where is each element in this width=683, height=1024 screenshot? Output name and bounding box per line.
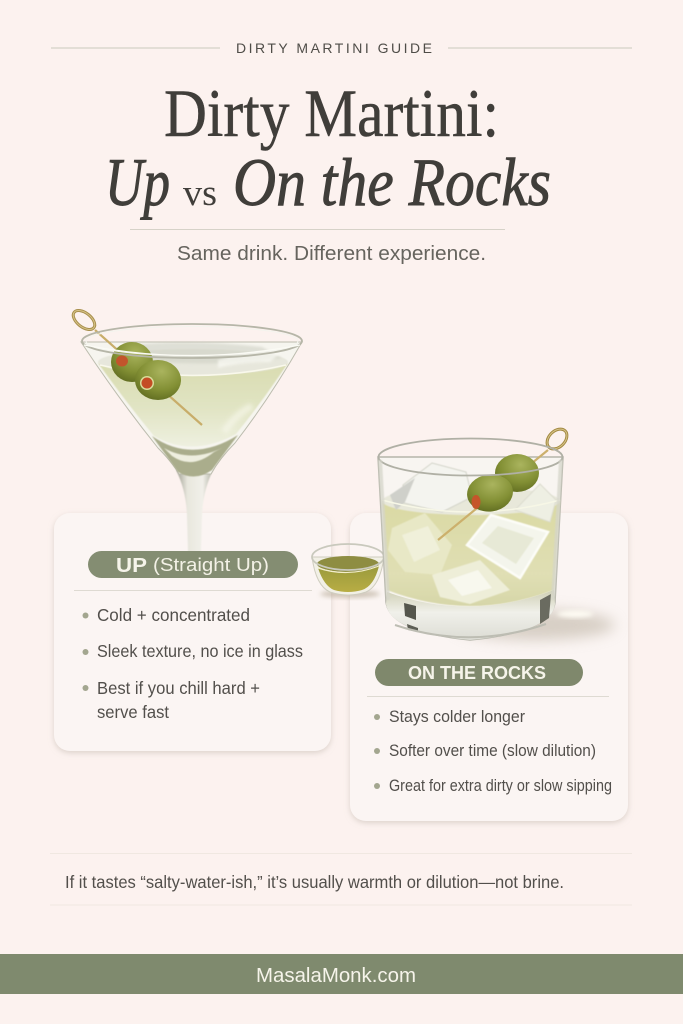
rim xyxy=(378,438,562,476)
bowl base tint xyxy=(152,435,238,477)
title: Dirty Martini: xyxy=(164,75,499,151)
bullet list: on the rocks: Stays colder longer xyxy=(389,708,525,726)
pill heading: on the rocks xyxy=(375,659,583,686)
panel: on the rocks xyxy=(350,513,628,821)
liquid xyxy=(98,363,288,447)
cocktail pick xyxy=(438,425,571,540)
stem xyxy=(176,468,214,552)
header label: DIRTY MARTINI GUIDE xyxy=(236,40,432,56)
bullet list: up: Sleek texture, no ice in glass xyxy=(97,641,303,661)
glass base xyxy=(386,590,555,640)
glass body xyxy=(378,457,563,640)
liquid xyxy=(382,500,560,606)
rim xyxy=(82,324,302,358)
panel: up xyxy=(54,513,331,751)
bullet list: up: serve fast xyxy=(97,702,169,722)
olive back xyxy=(495,454,539,492)
bullet list: on the rocks xyxy=(374,708,612,795)
illustration: small brine bowl xyxy=(312,544,384,598)
panel content: on the rocks xyxy=(367,659,612,795)
olive front xyxy=(465,471,515,515)
title: On the Rocks xyxy=(233,144,551,220)
glass bowl xyxy=(81,342,302,474)
cocktail pick xyxy=(70,307,202,425)
bullet list: up: Best if you chill hard + xyxy=(97,678,260,698)
bullet list: on the rocks: Great for extra dirty or slow sipping xyxy=(389,777,612,795)
title xyxy=(105,75,551,220)
pill heading: up xyxy=(88,551,298,578)
illustration: rocks glass with ice and olives xyxy=(378,425,615,640)
pill heading: on the rocks: ON THE ROCKS xyxy=(408,662,546,683)
bullet list: on the rocks: Softer over time (slow dilution) xyxy=(389,742,596,760)
subtitle: Same drink. Different experience. xyxy=(177,242,486,265)
bullet list: up: Cold + concentrated xyxy=(97,605,250,625)
surface xyxy=(98,349,288,375)
bullet list: up xyxy=(82,605,303,722)
table shadow xyxy=(455,610,615,640)
footer band xyxy=(0,954,683,994)
liquid surface line xyxy=(382,500,560,512)
title: Up xyxy=(105,144,170,220)
panel content: up xyxy=(74,551,312,722)
illustration: martini glass with olives xyxy=(70,307,302,552)
pill heading: up: (Straight Up) xyxy=(153,554,269,575)
ice cubes xyxy=(388,463,556,604)
pill heading: up: UP xyxy=(116,555,147,577)
callout note: If it tastes “salty-water-ish,” it’s usually warmth or dilution—not brine. xyxy=(65,872,564,892)
olive front xyxy=(135,360,181,400)
olive back xyxy=(111,342,153,382)
footer band: MasalaMonk.com xyxy=(256,965,416,987)
title: vs xyxy=(183,173,217,214)
